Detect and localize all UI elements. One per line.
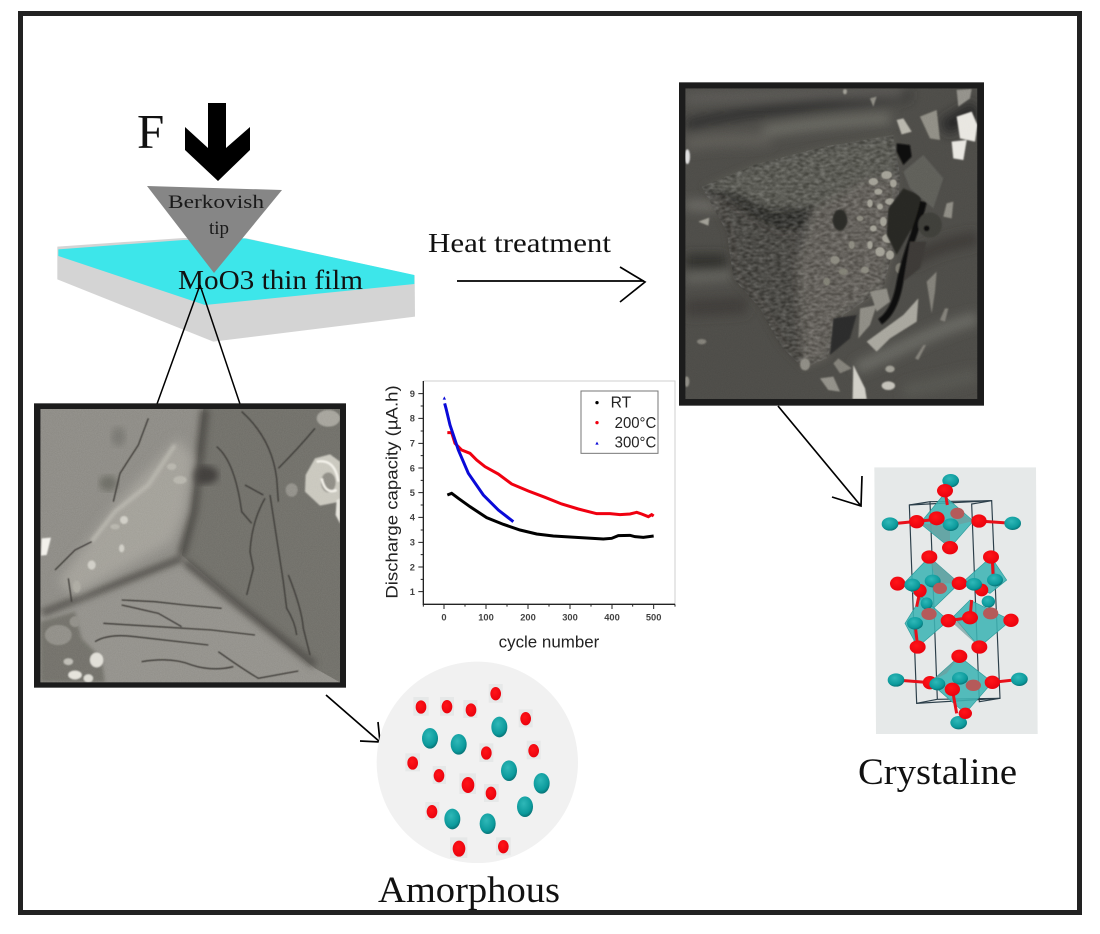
rough bright band xyxy=(58,438,193,595)
x axis numbers: 300 xyxy=(562,613,578,623)
zoom lines to micrograph xyxy=(157,285,240,404)
legend xyxy=(581,391,658,453)
wrinkled texture on indent xyxy=(700,132,907,372)
indent faces xyxy=(702,135,897,368)
y axis numbers: 2 xyxy=(410,562,415,572)
atom halo squares xyxy=(405,684,541,858)
x axis numbers xyxy=(441,613,661,623)
Berkovich indenter tip xyxy=(147,186,282,273)
y axis numbers: 8 xyxy=(410,414,415,424)
axis ticks xyxy=(418,394,675,609)
top right blob xyxy=(286,410,340,523)
x axis numbers: 400 xyxy=(604,613,620,623)
indentation schematic: force, Berkovich tip and film xyxy=(57,103,415,404)
y axis numbers: 3 xyxy=(410,538,415,548)
legend: RT xyxy=(611,395,632,412)
bottom left debris xyxy=(40,612,105,682)
label: Berkovish tip: Berkovish xyxy=(168,192,265,213)
y axis numbers: 1 xyxy=(410,587,415,597)
red atoms xyxy=(407,687,539,857)
ridge shadows xyxy=(42,409,315,665)
300°C starting points xyxy=(443,396,446,400)
micrograph: amorphous indent with cracks xyxy=(34,403,346,688)
background disc xyxy=(377,662,578,863)
x axis numbers: 500 xyxy=(646,613,661,623)
plot frame xyxy=(423,381,675,604)
x axis numbers: 0 xyxy=(441,613,447,623)
legend: 200°C xyxy=(615,415,656,432)
y axis title: Discharge capacity (µA.h) xyxy=(383,385,402,599)
y axis numbers: 6 xyxy=(410,463,415,473)
legend: 300°C xyxy=(615,435,656,452)
amorphous atom cluster xyxy=(377,662,578,863)
bright top-right flakes xyxy=(952,89,977,160)
RT series xyxy=(447,493,654,539)
teal atoms xyxy=(882,474,1028,729)
dark crack and holes xyxy=(830,143,942,355)
chart: discharge capacity vs cycle number xyxy=(383,381,675,651)
y axis numbers: 9 xyxy=(410,389,415,399)
octahedra xyxy=(903,495,1011,713)
crystal structure model xyxy=(874,467,1038,734)
stripes xyxy=(685,92,977,392)
arrow: heat treatment xyxy=(457,267,645,302)
y axis numbers xyxy=(410,389,416,597)
arrow: film micrograph to amorphous xyxy=(326,695,380,742)
teal atoms xyxy=(422,717,550,834)
label: Crystaline: Crystaline xyxy=(858,752,1017,793)
x axis title: cycle number xyxy=(499,632,600,651)
Mo bonds xyxy=(890,491,1019,713)
octahedra shaded facets xyxy=(922,510,979,680)
shaded oxygen atoms xyxy=(921,508,998,691)
red oxygen atoms xyxy=(890,484,1019,719)
icon: force arrow xyxy=(185,103,250,181)
speckled debris band xyxy=(823,171,905,286)
bright debris xyxy=(41,463,187,593)
y axis numbers: 4 xyxy=(410,513,416,523)
x axis numbers: 100 xyxy=(478,613,494,623)
background panel xyxy=(874,467,1038,734)
front teal atoms xyxy=(904,578,982,690)
label: Berkovish tip: tip xyxy=(209,218,229,239)
arrow: heated micrograph to crystal xyxy=(778,406,862,506)
300°C series xyxy=(445,403,513,522)
faces xyxy=(182,409,340,682)
unit cell wire frame xyxy=(909,501,1000,703)
flakes xyxy=(684,89,953,399)
label: Amorphous: Amorphous xyxy=(378,870,560,911)
y axis numbers: 5 xyxy=(410,488,415,498)
cracks xyxy=(55,412,315,678)
x axis numbers: 200 xyxy=(520,613,536,623)
label: MoO3 thin film: MoO3 thin film xyxy=(178,265,363,295)
200°C series xyxy=(447,433,654,517)
y axis numbers: 7 xyxy=(410,439,415,449)
label: F force: F xyxy=(137,104,164,159)
label: Heat treatment: Heat treatment xyxy=(428,228,612,258)
micrograph: crystalline indent after heat treatment xyxy=(679,82,984,406)
film substrate block xyxy=(57,238,415,342)
